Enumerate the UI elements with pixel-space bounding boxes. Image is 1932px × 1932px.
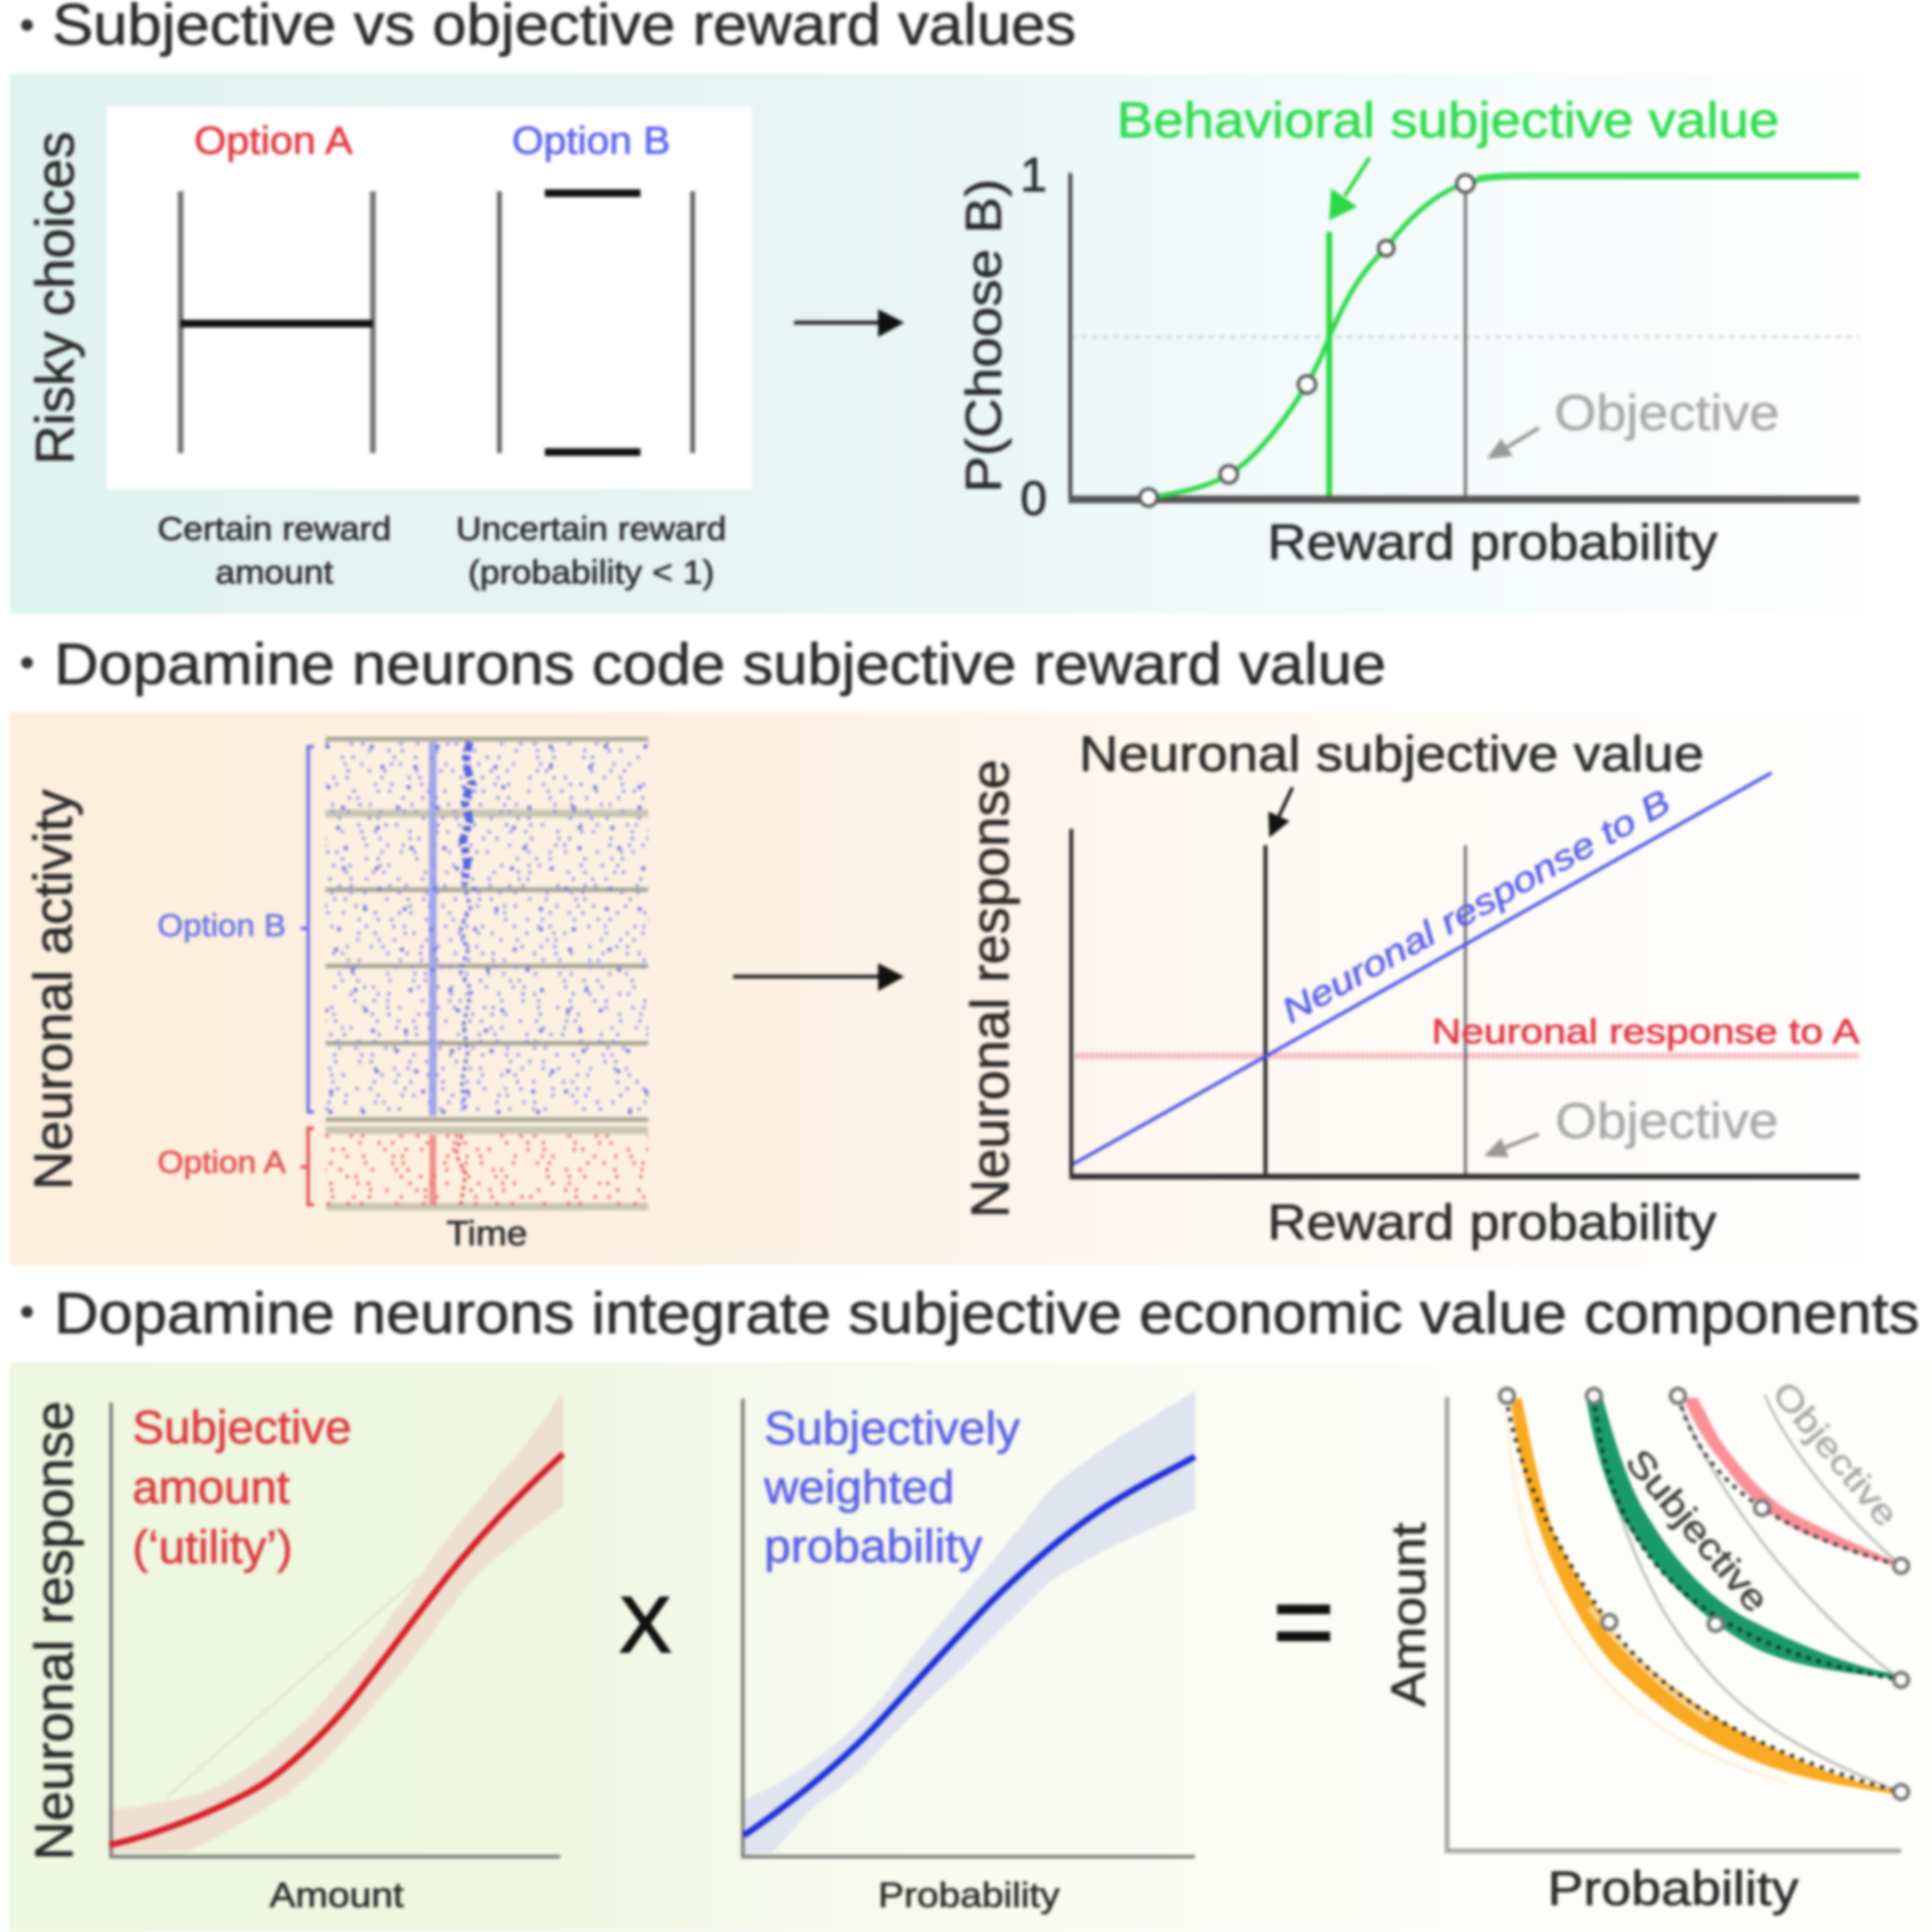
chart: subjective amount: Amount [270, 1875, 404, 1915]
chart: subjectively weighted probability: weighted [763, 1463, 954, 1514]
curve: pink [1678, 1395, 1901, 1567]
axis label: time: Time [446, 1213, 527, 1253]
caption: option A: Certain reward [157, 511, 391, 548]
chart: subjectively weighted probability: Probability [878, 1875, 1060, 1915]
chart: psychometric curve: Reward probability [1267, 515, 1718, 571]
caption: option B [456, 511, 726, 591]
curve: orange [1506, 1396, 1900, 1794]
heading: dopamine neurons integrate: Dopamine neurons integrate subjective economic value components [54, 1281, 1919, 1346]
panel: economic value components [10, 1362, 1932, 1932]
chart: indifference curves [1381, 1374, 1909, 1916]
caption: option B: (probability < 1) [468, 554, 715, 591]
chart: subjectively weighted probability [743, 1391, 1195, 1915]
chart: indifference curves: Amount [1381, 1522, 1435, 1707]
callout: objective [1484, 1094, 1778, 1157]
chart: neuronal response: Neuronal response to A [1432, 1011, 1860, 1051]
caption: option B: Uncertain reward [456, 511, 726, 548]
callout: objective: Objective [1555, 1094, 1778, 1150]
bracket: option B [157, 747, 314, 1112]
panel: risky choices [10, 73, 1893, 613]
vertical label: risky choices: Risky choices [24, 131, 85, 465]
callout: neuronal subjective value: Neuronal subjective value [1079, 726, 1704, 782]
caption: option A: amount [215, 554, 334, 591]
chart: subjective amount: (‘utility’) [132, 1522, 293, 1574]
raster plot [323, 734, 651, 1211]
chart: indifference curves: Objective [1765, 1374, 1907, 1534]
chart: subjective amount: Subjective [132, 1403, 352, 1454]
callout: objective [1487, 385, 1779, 459]
heading: dopamine neurons code: Dopamine neurons code subjective reward value [54, 632, 1386, 696]
chart: indifference curves: Probability [1548, 1861, 1799, 1916]
chart: psychometric curve: 1 [1020, 148, 1047, 202]
chart: neuronal response [959, 759, 1860, 1251]
vertical label: neuronal response: Neuronal response [23, 1401, 84, 1861]
chart: psychometric curve: 0 [1020, 471, 1047, 526]
chart: subjectively weighted probability: Subjectively [764, 1404, 1020, 1455]
callout: behavioral subjective value: Behavioral subjective value [1117, 93, 1779, 149]
chart: psychometric curve [956, 148, 1860, 571]
callout: behavioral subjective value [1117, 93, 1779, 220]
white box: option diagrams: Option B [512, 120, 670, 162]
chart: neuronal response: Neuronal response [959, 759, 1020, 1218]
panel: neuronal activity [0, 712, 1893, 1265]
chart: psychometric curve: P(Choose B) [956, 179, 1012, 493]
bracket: option A [157, 1128, 314, 1205]
chart: indifference curves: Subjective [1617, 1442, 1776, 1621]
vertical label: neuronal activity: Neuronal activity [22, 789, 83, 1190]
arrow: raster to response chart [733, 963, 904, 991]
callout: objective: Objective [1554, 385, 1779, 441]
chart: neuronal response: Neuronal response to B [1275, 781, 1677, 1031]
arrow: choices to psychometric curve [794, 309, 904, 337]
bracket: option A: Option A [157, 1145, 287, 1179]
operator: equals [1277, 1605, 1330, 1641]
chart: subjective amount [109, 1391, 563, 1915]
chart: subjective amount: amount [132, 1463, 290, 1514]
white box: option diagrams [107, 106, 752, 489]
curve: green [1586, 1396, 1901, 1680]
chart: neuronal response: Reward probability [1267, 1195, 1717, 1251]
operator: multiply: X [619, 1581, 671, 1669]
white box: option diagrams: Option A [194, 120, 353, 162]
caption: option A [157, 511, 391, 591]
callout: neuronal subjective value [1079, 726, 1704, 838]
bracket: option B: Option B [157, 908, 286, 943]
chart: subjectively weighted probability: probability [764, 1521, 982, 1573]
